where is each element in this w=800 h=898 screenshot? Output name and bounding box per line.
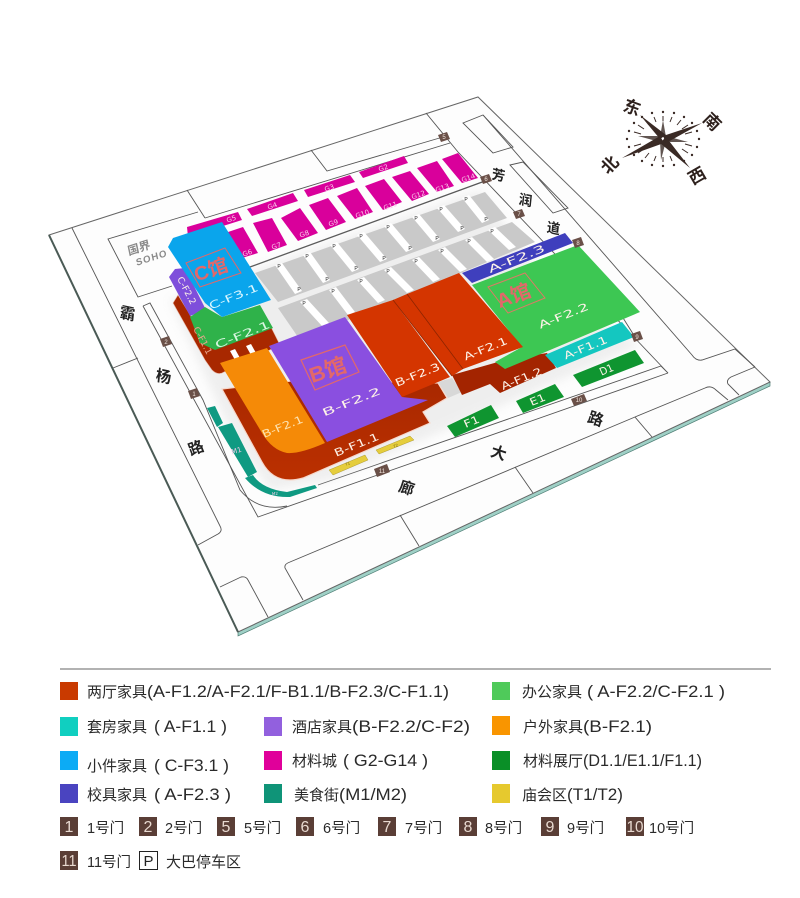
material city blocks G2-G14: G8 <box>299 229 310 239</box>
gate numbers on map: 2 <box>164 340 168 346</box>
legend: suite furniture <box>60 717 227 736</box>
road names: 路 <box>585 407 607 430</box>
material city blocks G2-G14: G9 <box>328 218 339 228</box>
compass directions: 西 <box>685 164 709 189</box>
material city blocks G2-G14: G14 <box>460 172 476 184</box>
legend: gates <box>60 817 694 871</box>
legend: gates: 6号门 <box>323 820 360 837</box>
area labels: A-F2.3 <box>486 242 547 276</box>
board surface <box>49 97 770 632</box>
compass directions: 南 <box>699 109 725 135</box>
legend: hotel furniture: (B-F2.2/C-F2) <box>352 717 470 736</box>
parking: lower band: P <box>490 229 494 235</box>
hall B sign <box>301 345 359 390</box>
hall B ground floor B-F1.1 <box>222 380 447 480</box>
legend: outdoor furniture: 户外家具 <box>523 719 583 736</box>
legend: material showroom: 材料展厅 <box>523 753 583 770</box>
legend: small furniture: ( C-F3.1 ) <box>154 756 229 775</box>
legend: gates: 2号门 <box>165 820 202 837</box>
A-F2.2 office furniture <box>472 245 640 369</box>
road names: 大 <box>488 442 509 464</box>
legend: school furniture: 校具家具 <box>87 787 147 804</box>
parking: upper band: P <box>277 264 281 270</box>
material city blocks G2-G14: G12 <box>410 189 426 201</box>
legend: bus parking: 大巴停车区 <box>166 854 241 871</box>
legend: temple fair: (T1/T2) <box>567 785 623 804</box>
legend: gates: 7 <box>383 819 392 836</box>
legend: small furniture: 小件家具 <box>87 758 147 775</box>
parking: lower band: P <box>440 249 444 255</box>
legend: gates: 11号门 <box>87 854 131 871</box>
legend: office furniture: 办公家具 <box>522 684 582 701</box>
area labels: C-F2.2 <box>174 275 197 307</box>
legend: gates: 5号门 <box>244 820 281 837</box>
area labels: A-F1.2 <box>499 365 544 393</box>
material city blocks G2-G14 <box>187 153 478 258</box>
parking: lower band: P <box>331 289 335 295</box>
legend: school furniture <box>60 784 231 804</box>
material city blocks G2-G14: G3 <box>324 183 335 193</box>
map board <box>49 97 770 636</box>
hall A ground floor A-F1.2 <box>452 353 556 395</box>
parking: upper band: P <box>386 225 390 231</box>
area labels: M1 <box>230 446 243 456</box>
B-F2.2 hotel furniture <box>269 317 428 442</box>
gate numbers on map: 6 <box>484 177 488 183</box>
area labels: C-F3.1 <box>207 281 260 312</box>
legend: material city: 材料城 <box>292 753 337 770</box>
parcel shadow <box>170 190 640 490</box>
legend: gates: 10号门 <box>649 820 694 837</box>
area labels <box>174 242 616 496</box>
compass directions: 东 <box>621 95 643 120</box>
legend: temple fair <box>492 784 623 804</box>
gate numbers on map: 9 <box>635 335 639 341</box>
legend: gates: 11 <box>62 853 77 870</box>
area labels: E1 <box>527 391 548 409</box>
legend: food street <box>264 784 407 804</box>
A-F2.1 and B-F2.3 living room furniture <box>347 273 523 397</box>
C-F3.1 small furniture <box>168 222 271 317</box>
legend: suite furniture: ( A-F1.1 ) <box>154 717 227 736</box>
C-F2.2 hotel furniture <box>169 268 206 316</box>
parking: upper band: P <box>382 256 386 262</box>
parking: lower band <box>278 222 535 340</box>
compass rays <box>622 115 702 168</box>
parking: upper band: P <box>408 246 412 252</box>
legend: material showroom <box>492 751 702 770</box>
legend: bus parking: P <box>143 853 154 870</box>
legend: temple fair: 庙会区 <box>522 787 567 804</box>
compass directions: 北 <box>597 152 623 178</box>
road names: 芳 <box>491 166 506 184</box>
parking: lower band: P <box>359 279 363 285</box>
B-F2.1 outdoor furniture <box>220 348 325 453</box>
legend: small furniture <box>60 751 229 775</box>
legend: material city: ( G2-G14 ) <box>343 751 428 770</box>
hall C sign <box>186 248 241 287</box>
road outlines <box>72 113 755 617</box>
legend: gates: 7号门 <box>405 820 442 837</box>
gate numbers on map: 7 <box>517 212 521 218</box>
road names: 霸 <box>119 303 136 325</box>
material city blocks G2-G14: G6 <box>242 248 253 258</box>
area labels: B-F2.3 <box>393 360 442 389</box>
compass directions <box>597 95 725 189</box>
road names: 路 <box>185 436 207 460</box>
material city blocks G2-G14: G10 <box>354 208 370 220</box>
parking: upper band: P <box>484 217 488 223</box>
A-F2.3 school furniture <box>462 233 573 283</box>
parking: upper band: P <box>464 197 468 203</box>
area labels: T2 <box>391 442 399 449</box>
parking: upper band: P <box>325 277 329 283</box>
tile between halls <box>438 378 462 398</box>
road names: 润 <box>518 191 533 209</box>
parking: upper band: P <box>305 254 309 260</box>
gate numbers on map: 8 <box>576 241 580 247</box>
area labels: A-F2.2 <box>536 300 591 331</box>
white passages <box>230 344 256 360</box>
parking: upper band <box>255 192 507 302</box>
parking: upper band: P <box>332 244 336 250</box>
hall C sign: C馆 <box>191 254 231 286</box>
gate numbers on map: 5 <box>442 135 446 141</box>
legend: hotel furniture: 酒店家具 <box>292 719 352 736</box>
area labels: B-F2.2 <box>320 385 383 419</box>
area labels: C-F1.1 <box>190 325 213 357</box>
legend: gates: 10 <box>626 819 644 836</box>
legend: gates: 9 <box>546 819 555 836</box>
road names: 杨 <box>155 366 172 388</box>
material city blocks G2-G14: G11 <box>382 200 398 212</box>
A-F1.1 suite furniture <box>545 322 634 368</box>
board base edge <box>238 382 770 636</box>
legend: living room furniture: (A-F1.2/A-F2.1/F-B1.1/B-F2.3/C-F1.1) <box>147 682 449 701</box>
area labels: F1 <box>461 413 482 431</box>
parking: upper band: P <box>297 287 301 293</box>
legend: gates: 9号门 <box>567 820 604 837</box>
label: SOHO building <box>127 234 169 271</box>
legend: material showroom: (D1.1/E1.1/F1.1) <box>583 751 702 770</box>
parking: upper band: P <box>460 226 464 232</box>
parking: upper band: P <box>435 236 439 242</box>
parking: lower band: P <box>467 239 471 245</box>
area labels: C-F2.1 <box>213 318 272 351</box>
board left edge <box>49 235 238 632</box>
hall A sign <box>488 273 545 313</box>
food street M1 M2 <box>207 406 317 497</box>
material city blocks G2-G14: G4 <box>267 201 278 211</box>
compass ticks <box>634 116 692 162</box>
C-F2.1 office furniture <box>190 305 273 350</box>
label: SOHO building: SOHO <box>135 248 169 269</box>
compass <box>597 95 725 189</box>
legend: gates: 5 <box>222 819 231 836</box>
road names: 道 <box>546 219 561 237</box>
legend: hotel furniture <box>264 717 470 736</box>
gate numbers on map: 10 <box>576 398 583 404</box>
legend: office furniture: ( A-F2.2/C-F2.1 ) <box>587 682 725 701</box>
road names: 廊 <box>396 476 417 499</box>
material city blocks G2-G14: G13 <box>434 182 450 194</box>
legend: gates: 1号门 <box>87 820 124 837</box>
legend: gates: 2 <box>144 819 153 836</box>
legend: gates: 8 <box>464 819 473 836</box>
legend: food street: (M1/M2) <box>339 785 407 804</box>
legend <box>60 669 771 871</box>
legend: office furniture <box>492 682 725 701</box>
gate numbers on map: 1 <box>192 392 196 398</box>
parking: upper band: P <box>354 266 358 272</box>
hall A sign: A馆 <box>493 279 534 313</box>
parking: upper band: P <box>359 234 363 240</box>
exhibition halls D1 E1 F1 <box>447 350 644 437</box>
material city blocks G2-G14: G5 <box>226 214 237 224</box>
hall B sign: B馆 <box>306 352 350 388</box>
material city blocks G2-G14: G2 <box>378 163 389 173</box>
hall C ground floor C-F1.1 <box>173 295 280 374</box>
area labels: M2 <box>272 491 279 496</box>
legend: suite furniture: 套房家具 <box>87 719 147 736</box>
legend: bus parking <box>140 852 241 871</box>
gate numbers on map <box>164 135 639 475</box>
parking: upper band: P <box>414 216 418 222</box>
road names <box>119 166 607 499</box>
area labels: T1 <box>343 460 351 467</box>
gates on map <box>160 132 643 477</box>
legend: school furniture: ( A-F2.3 ) <box>154 785 231 804</box>
material city blocks G2-G14: G7 <box>271 241 282 251</box>
legend: living room furniture: 两厅家具 <box>87 684 147 701</box>
area labels: A-F2.1 <box>462 335 510 363</box>
parking: lower band: P <box>302 301 306 307</box>
parking: lower band: P <box>414 259 418 265</box>
area labels: D1 <box>597 362 616 378</box>
area labels: B-F2.1 <box>260 413 305 441</box>
legend: material city <box>264 751 428 770</box>
parking: lower band: P <box>386 269 390 275</box>
area labels: A-F1.1 <box>562 334 610 362</box>
legend: outdoor furniture <box>492 716 652 736</box>
gate numbers on map: 11 <box>379 469 386 475</box>
label: SOHO building: 国界 <box>127 238 152 258</box>
parking: upper band: P <box>439 207 443 213</box>
compass dots <box>627 112 699 166</box>
temple fair T1 T2 <box>329 436 414 475</box>
area labels: B-F1.1 <box>332 430 381 459</box>
legend: gates: 8号门 <box>485 820 522 837</box>
legend: gates: 6 <box>301 819 310 836</box>
legend: gates: 1 <box>65 819 74 836</box>
legend: food street: 美食街 <box>294 787 339 804</box>
legend: outdoor furniture: (B-F2.1) <box>583 717 652 736</box>
